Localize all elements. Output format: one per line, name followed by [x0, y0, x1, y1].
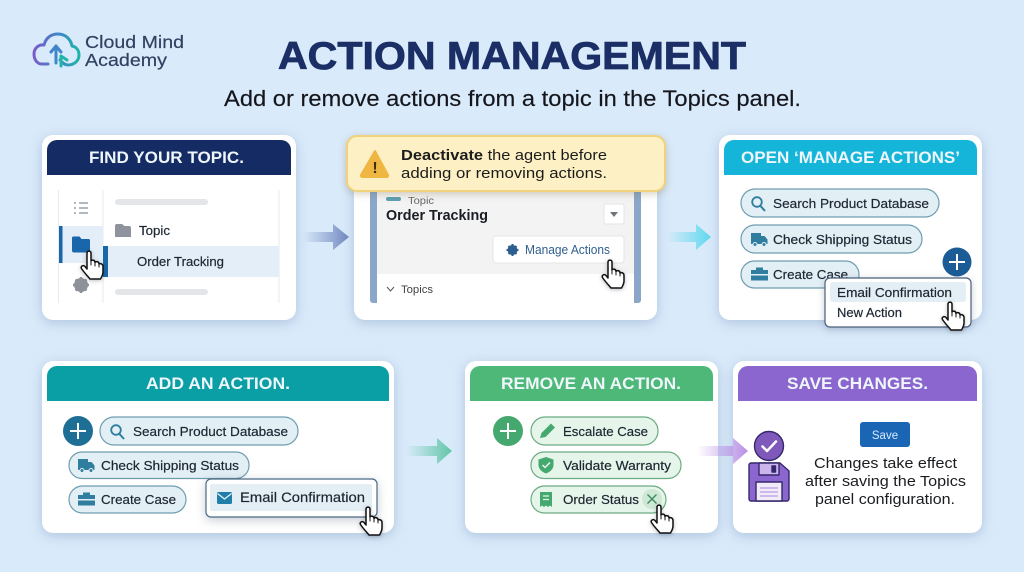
panel: remove an action: [465, 361, 718, 533]
icon: gray folder: [115, 224, 131, 237]
panel: deactivate and manage actions: [347, 136, 665, 320]
header: remove an action: [470, 366, 713, 401]
manage actions button: [493, 236, 624, 263]
dropdown menu: [825, 278, 971, 327]
pill: check shipping status: [69, 452, 249, 478]
topic record mock: Topic: [408, 195, 434, 207]
dropdown button: [604, 204, 624, 224]
pill: create case: [741, 261, 859, 288]
pill: search product database: Search Product Database: [133, 424, 288, 439]
icon: hand cursor: [360, 507, 382, 535]
pill: check shipping status: Check Shipping Status: [101, 458, 240, 473]
icon: floppy disk with check: [749, 432, 789, 501]
topics row: Topics: [401, 284, 434, 296]
description text: Changes take effect: [814, 455, 958, 472]
pill: create case: [69, 486, 186, 513]
pill: create case: Create Case: [773, 267, 848, 282]
subtitle: Add or remove actions from a topic in the Topics panel.: [224, 86, 801, 111]
topics row: [387, 284, 434, 296]
pill: search product database: [100, 417, 298, 445]
pill: search product database: [741, 189, 939, 217]
pill: validate warranty: Validate Warranty: [563, 458, 672, 473]
header: find your topic: [47, 140, 291, 175]
pill: order status with remove control: [531, 486, 666, 513]
icon: plus button: [493, 416, 523, 446]
header: add an action: [47, 366, 389, 401]
header: open manage actions: OPEN ‘MANAGE ACTIONS’: [741, 148, 960, 167]
icon: warning triangle: !: [372, 160, 378, 177]
pill: check shipping status: Check Shipping Status: [773, 232, 913, 247]
panel: add an action: [42, 361, 394, 535]
icon: hand cursor: [942, 302, 964, 330]
icon: list: [74, 203, 88, 213]
placeholder bar: [115, 289, 208, 295]
pill: create case: Create Case: [101, 492, 176, 507]
panel: open manage actions: [719, 135, 982, 330]
icon: blue folder: [72, 236, 90, 252]
logo: Cloud Mind Academy: Cloud Mind: [85, 32, 184, 52]
logo: Cloud Mind Academy: [34, 32, 184, 70]
topic record mock: [370, 185, 641, 303]
popup: email confirmation: [206, 479, 377, 517]
header: save changes: SAVE CHANGES.: [787, 374, 928, 393]
panel: save changes: [733, 361, 982, 533]
callout: deactivate warning: Deactivate the agent before: [401, 147, 607, 164]
logo: Cloud Mind Academy: Academy: [85, 50, 167, 70]
header: find your topic: FIND YOUR TOPIC.: [89, 148, 244, 167]
callout: deactivate warning: adding or removing actions.: [401, 165, 607, 182]
description text: panel configuration.: [815, 491, 955, 508]
pill: order status with remove control: Order Status: [563, 492, 640, 507]
manage actions button: Manage Actions: [525, 243, 610, 257]
pill: check shipping status: [741, 225, 922, 253]
title: ACTION MANAGEMENT: [278, 35, 746, 78]
icon: hand cursor: [602, 260, 624, 288]
description text: [805, 455, 966, 508]
dropdown menu: New Action: [837, 305, 902, 320]
placeholder bar: [115, 199, 208, 205]
pill: escalate case: Escalate Case: [563, 424, 648, 439]
icon: hand cursor: [651, 505, 673, 533]
pill: validate warranty: [531, 452, 681, 478]
selected row: order tracking: [103, 246, 279, 277]
dropdown menu: Email Confirmation: [837, 285, 952, 300]
save button: Save: [872, 430, 898, 442]
label: topic: Topic: [139, 223, 170, 238]
icon: plus button: [63, 416, 93, 446]
panel: find your topic: [42, 135, 296, 320]
header: remove an action: REMOVE AN ACTION.: [501, 374, 681, 393]
header: open manage actions: [724, 140, 977, 175]
icon: plus button: [942, 248, 972, 276]
arrow: step 2 to 3: [667, 224, 711, 250]
arrow: step 5 to 6: [697, 438, 748, 464]
header: save changes: [738, 366, 977, 401]
icon: hand cursor: [81, 251, 103, 279]
icon: warning triangle: [361, 151, 388, 177]
popup: email confirmation: Email Confirmation: [240, 489, 365, 505]
callout: deactivate warning: [347, 136, 665, 191]
sidebar selected item: [59, 226, 103, 263]
icon: cloud with arrows: [34, 34, 79, 66]
pill: search product database: Search Product Database: [773, 196, 929, 211]
arrow: step 1 to 2: [303, 224, 349, 250]
header: add an action: ADD AN ACTION.: [146, 374, 290, 393]
arrow: step 4 to 5: [406, 438, 452, 464]
description text: after saving the Topics: [805, 473, 966, 490]
save button: [860, 422, 910, 447]
icon: gear: [73, 277, 89, 293]
pill: escalate case: [531, 417, 658, 445]
selected row: order tracking: Order Tracking: [137, 254, 224, 269]
topic record mock: Order Tracking: [386, 207, 488, 224]
